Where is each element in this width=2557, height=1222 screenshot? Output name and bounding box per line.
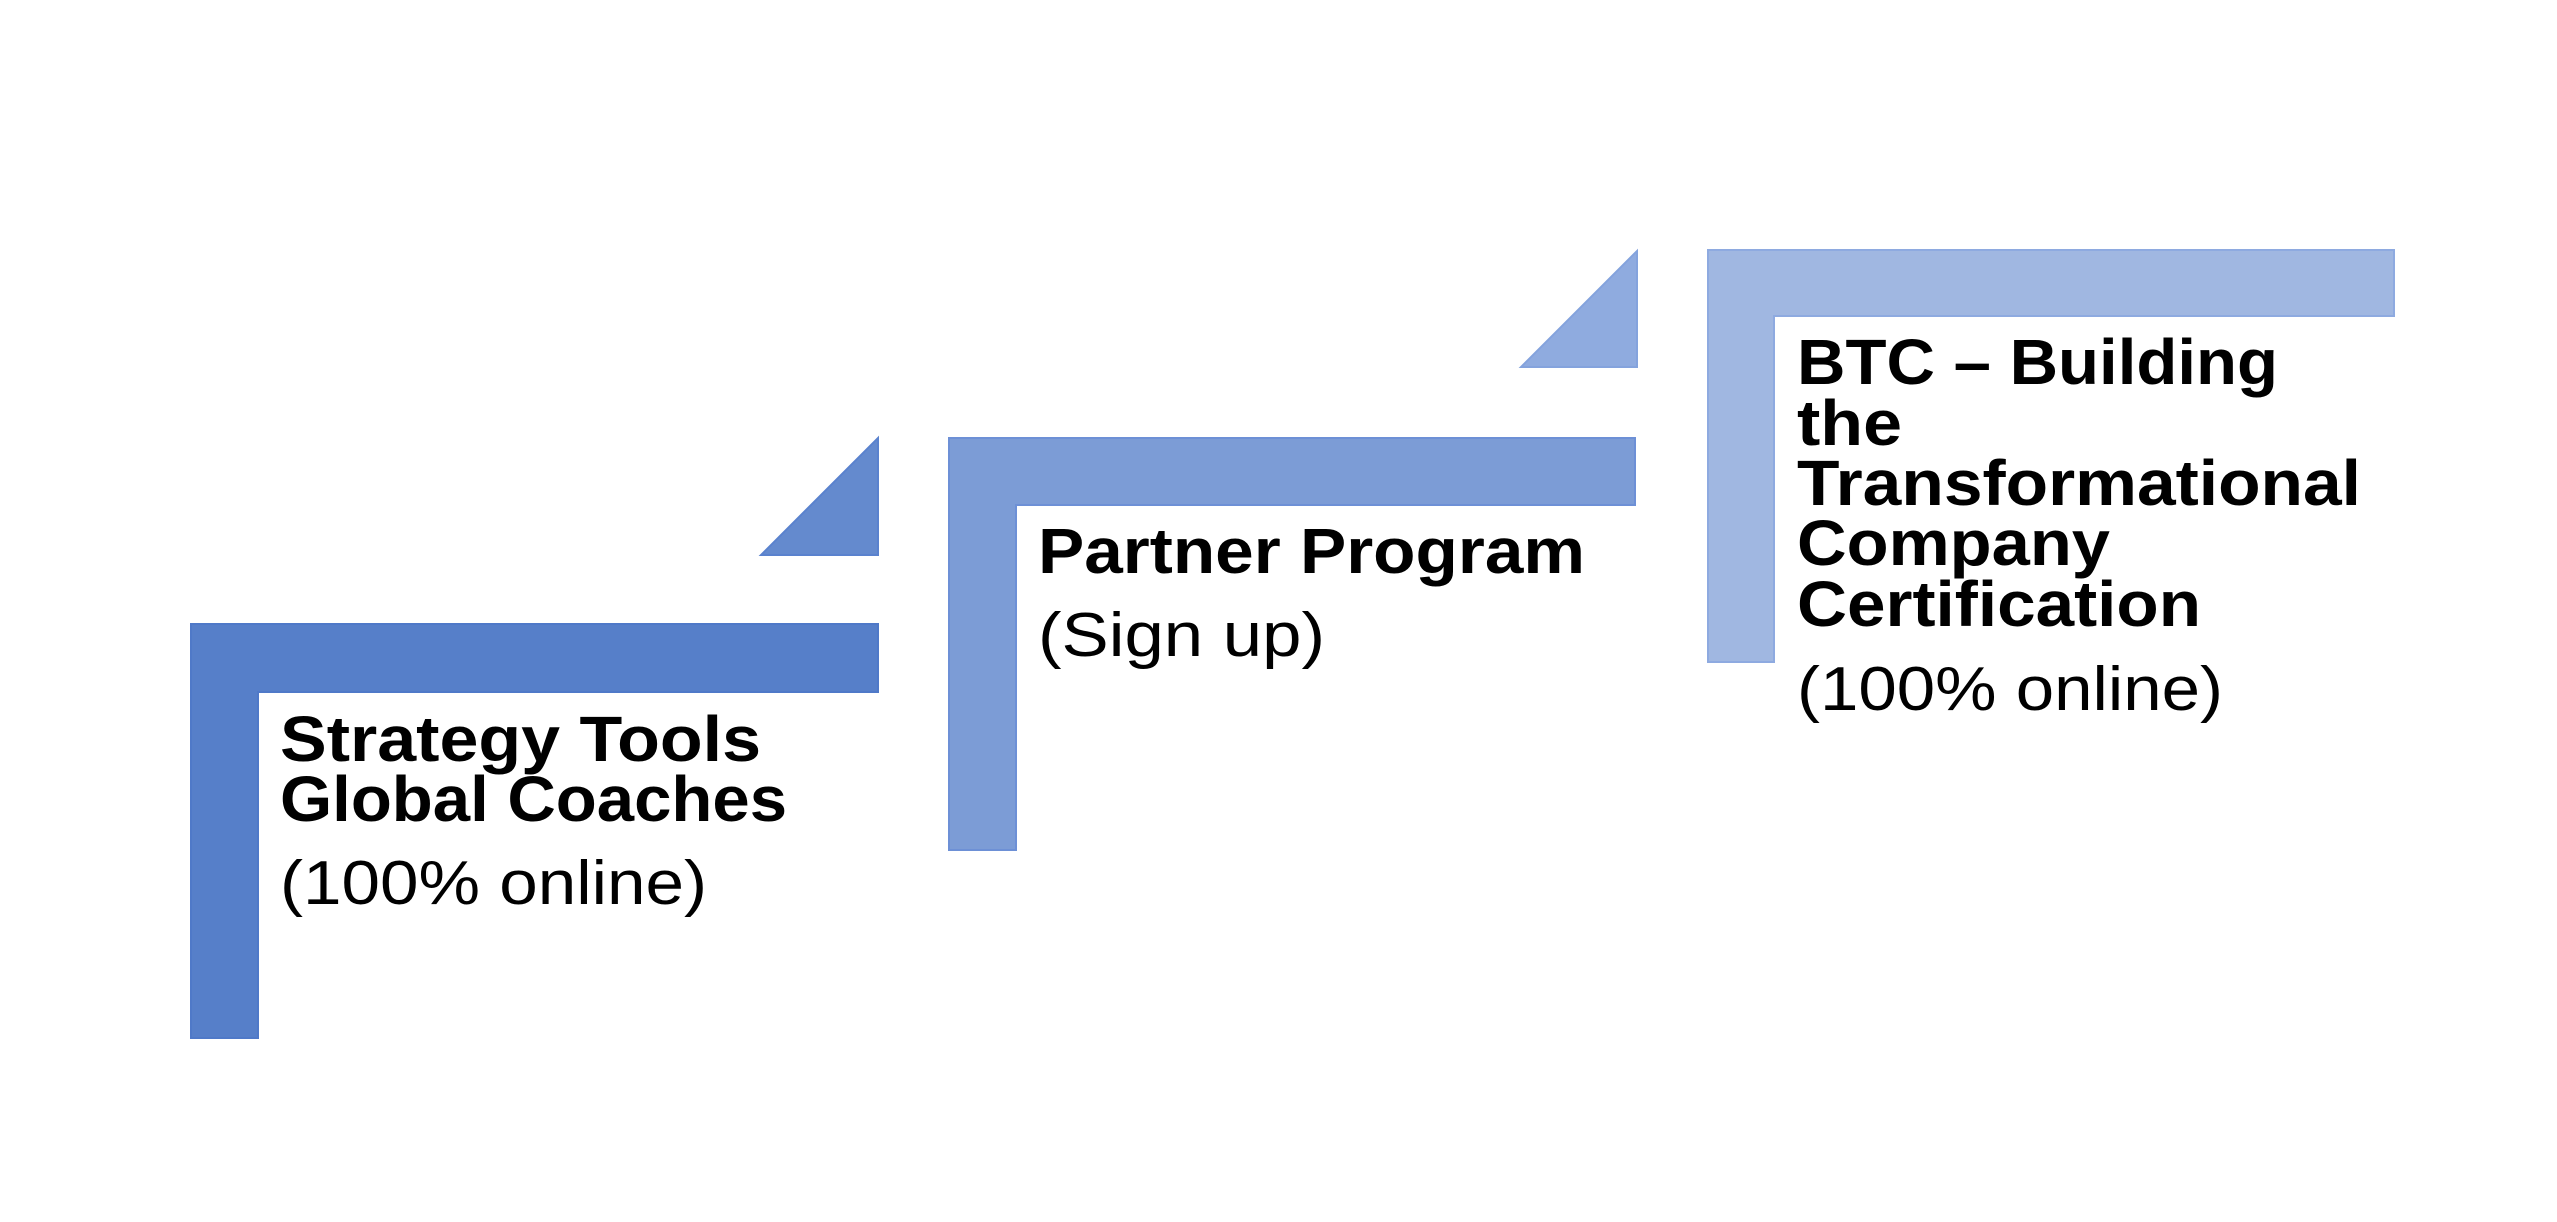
- corner shape: step 3: [1708, 250, 2394, 662]
- heading: step 3: [1797, 326, 2361, 640]
- arrow triangle: step 2 to step 3: [1521, 251, 1637, 367]
- heading: step 1: [280, 703, 787, 835]
- heading: step 3: the: [1797, 387, 1902, 459]
- corner shape: step 1: [191, 624, 878, 1038]
- heading: step 3: Company: [1797, 507, 2110, 579]
- heading: step 3: Transformational: [1797, 447, 2361, 519]
- heading: step 1: Global Coaches: [280, 763, 787, 835]
- subtext: step 2: (Sign up): [1038, 601, 1325, 670]
- subtext: step 1: (100% online): [280, 849, 707, 918]
- heading: step 3: BTC – Building: [1797, 326, 2278, 398]
- subtext: step 3: (100% online): [1797, 655, 2223, 724]
- heading: step 1: Strategy Tools: [280, 703, 761, 775]
- heading: step 3: Certification: [1797, 568, 2201, 640]
- arrow triangle: step 1 to step 2: [761, 438, 878, 555]
- step 2: Partner Program: [949, 438, 1635, 850]
- heading: step 2: Partner Program: [1038, 515, 1585, 587]
- step 1: Strategy Tools Global Coaches: [191, 624, 878, 1038]
- step 3: BTC certification: [1708, 250, 2394, 724]
- corner shape: step 2: [949, 438, 1635, 850]
